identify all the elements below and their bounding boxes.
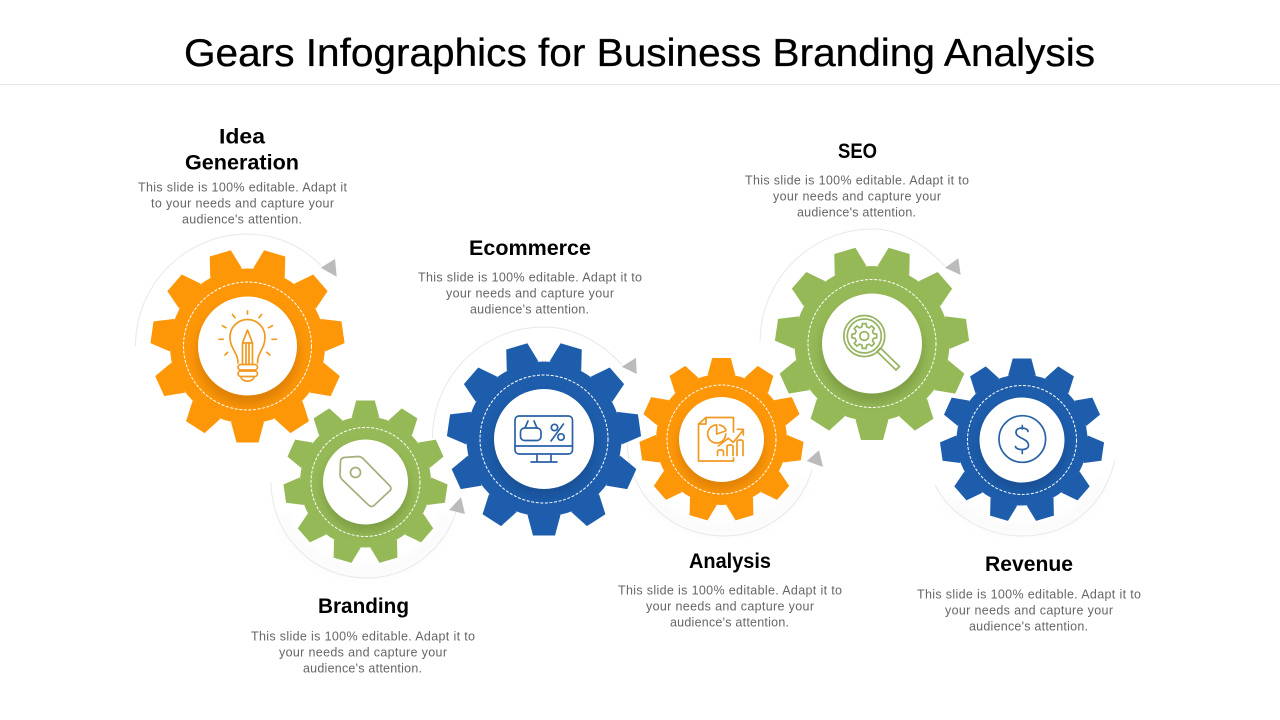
blue gear wheel [446,342,642,536]
label: idea generation: Generation [185,152,299,174]
rotation arc with arrow [136,234,337,346]
orange gear wheel [639,358,804,522]
icon: magnifier with cog [844,316,900,370]
label: ecommerce: Ecommerce [469,237,591,260]
label: revenue: This slide is 100% editable. Adapt it to [917,588,1141,602]
gear: idea generation [136,234,345,442]
label: seo: SEO [838,140,877,163]
icon: report with pie and bar charts [698,418,743,461]
gear: ecommerce [432,327,642,536]
blue gear wheel [939,358,1105,522]
label: seo [745,140,969,220]
label: analysis: audience's attention. [670,616,789,630]
gear: analysis [627,358,823,536]
label: branding [251,595,475,676]
green gear wheel [283,400,448,564]
label: revenue: audience's attention. [969,620,1088,634]
gear: branding [271,400,465,578]
label: branding: your needs and capture your [279,646,447,660]
gear: revenue [935,358,1115,536]
label: idea generation: Idea [219,126,265,148]
orange gear wheel [150,249,345,442]
label: idea generation: This slide is 100% editable. Adapt it [138,181,348,195]
green gear wheel [774,246,970,440]
label: seo: audience's attention. [797,206,916,220]
icon: light bulb with pencil [219,311,276,381]
label: idea generation [138,126,348,226]
label: idea generation: audience's attention. [182,212,302,226]
rotation arc [935,460,1115,536]
rotation arc with arrow [760,229,961,342]
icon: monitor with basket and percent [515,416,572,462]
rotation arc with arrow [432,327,637,438]
icon: dollar coin [999,416,1046,462]
label: analysis: Analysis [689,550,771,573]
label: idea generation: to your needs and capture your [151,196,334,210]
label: revenue: your needs and capture your [945,604,1113,618]
label: analysis [618,550,842,630]
label: ecommerce [418,237,642,317]
title: Gears Infographics for Business Branding Analysis [184,32,1095,75]
gear: seo [760,229,970,440]
label: ecommerce: audience's attention. [470,303,589,317]
label: ecommerce: your needs and capture your [446,287,614,301]
label: branding: Branding [318,595,409,618]
label: branding: This slide is 100% editable. Adapt it to [251,630,475,644]
label: analysis: This slide is 100% editable. Adapt it to [618,584,842,598]
label: revenue: Revenue [985,553,1073,576]
icon: price tag [340,456,391,506]
label: revenue [917,553,1141,634]
rotation arc with arrow [627,440,823,536]
label: seo: your needs and capture your [773,190,941,204]
rotation arc with arrow [271,482,465,578]
label: analysis: your needs and capture your [646,600,814,614]
label: seo: This slide is 100% editable. Adapt it to [745,174,969,188]
label: branding: audience's attention. [303,662,422,676]
label: ecommerce: This slide is 100% editable. Adapt it to [418,271,642,285]
